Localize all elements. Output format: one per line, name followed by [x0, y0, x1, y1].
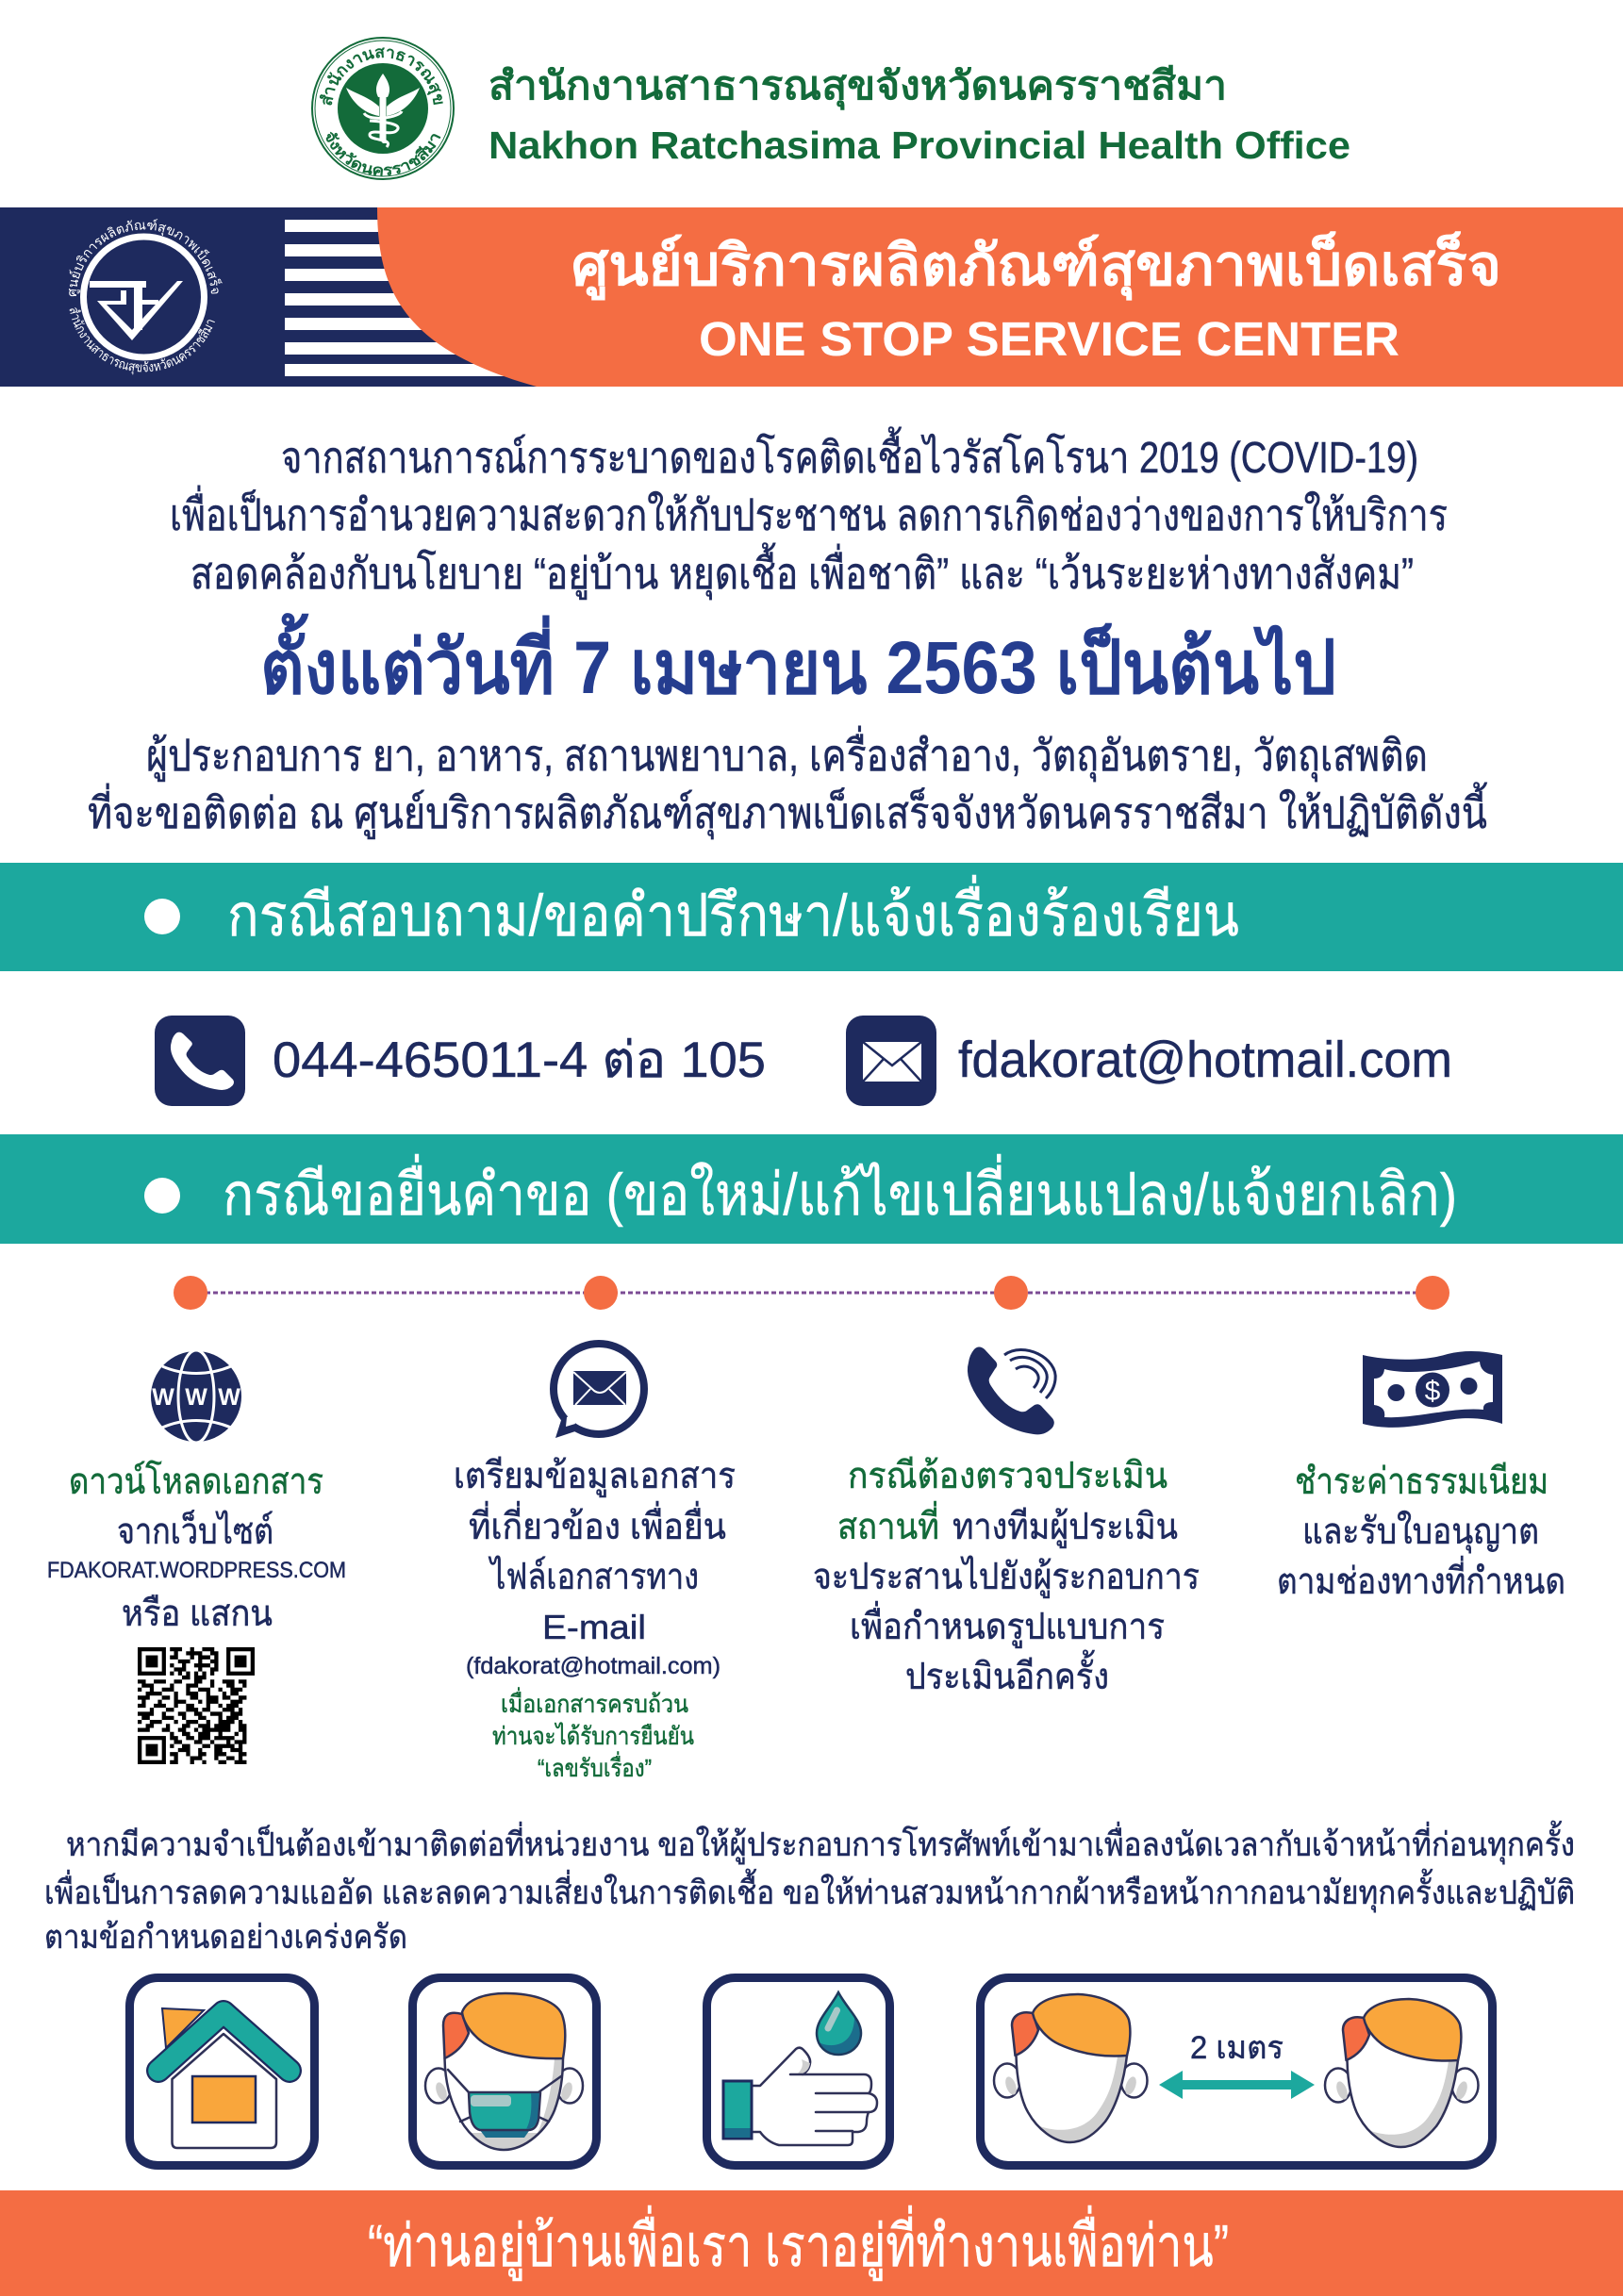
contact: email: fdakorat@hotmail.com — [958, 1032, 1452, 1088]
icon: speech bubble envelope — [554, 1344, 644, 1438]
logo: provincial health office seal — [311, 37, 455, 180]
logo: provincial health office seal: จังหวัดนครราชสีมา — [326, 132, 441, 175]
contact: phone: 044-465011-4 ต่อ 105 — [273, 1032, 766, 1088]
section bar: applications — [0, 1134, 1623, 1244]
person left — [994, 1994, 1147, 2142]
step 2: prepare documents: ท่านจะได้รับการยืนยัน — [492, 1722, 694, 1750]
step 4: pay fees — [1277, 1351, 1565, 1602]
step 2: prepare documents: “เลขรับเรื่อง” — [538, 1751, 652, 1782]
arrow: two metres — [1159, 2071, 1315, 2099]
footer band — [0, 2190, 1623, 2296]
organisation name in English: Nakhon Ratchasima Provincial Health Office — [489, 124, 1350, 167]
icon: globe www: W — [185, 1384, 207, 1411]
intro text: สอดคล้องกับนโยบาย “อยู่บ้าน หยุดเชื้อ เพื่อชาติ” และ “เว้นระยะห่างทางสังคม” — [190, 542, 1414, 601]
step 2: prepare documents: เตรียมข้อมูลเอกสาร — [454, 1456, 736, 1497]
step 4: pay fees: ชำระค่าธรรมเนียม — [1295, 1462, 1548, 1502]
header: health office logo and name — [311, 37, 1350, 180]
intro text — [170, 426, 1448, 601]
step 2: prepare documents: เมื่อเอกสารครบถ้วน — [501, 1687, 688, 1718]
section bar: applications: กรณีขอยื่นคำขอ (ขอใหม่/แก้ไขเปลี่ยนแปลง/แจ้งยกเลิก) — [223, 1154, 1457, 1228]
banner title Thai: ศูนย์บริการผลิตภัณฑ์สุขภาพเบ็ดเสร็จ — [571, 231, 1501, 301]
footer band: “ท่านอยู่บ้านเพื่อเรา เราอยู่ที่ทำงานเพื่อท่าน” — [368, 2205, 1229, 2281]
operators text — [88, 725, 1487, 840]
notice paragraph: ตามข้อกำหนดอย่างเคร่งครัด — [44, 1919, 407, 1956]
step 3: site inspection: เพื่อกำหนดรูปแบบการ — [850, 1601, 1165, 1648]
step 2: prepare documents: (fdakorat@hotmail.com) — [466, 1653, 720, 1679]
label: 2 metres: 2 เมตร — [1190, 2030, 1283, 2066]
icon: hand — [723, 2048, 877, 2145]
step 3: site inspection: ประเมินอีกครั้ง — [905, 1649, 1109, 1697]
panel: keep 2 metres apart — [981, 1978, 1492, 2165]
logo: one stop service seal: สำนักงานสาธารณสุขจังหวัดนครราชสีมา — [70, 307, 215, 375]
icon: globe www: W — [218, 1384, 240, 1411]
step 1: download — [47, 1350, 346, 1762]
icon: phone — [155, 1016, 245, 1106]
banner title English: ONE STOP SERVICE CENTER — [699, 312, 1399, 366]
icon: banknote: $ — [1425, 1376, 1441, 1407]
timeline — [174, 1276, 1449, 1310]
logo: provincial health office seal: สำนักงานสาธารณสุข — [319, 47, 443, 106]
date headline: ตั้งแต่วันที่ 7 เมษายน 2563 เป็นต้นไป — [260, 613, 1336, 709]
contact: email — [846, 1016, 1452, 1106]
icon: banknote — [1363, 1351, 1502, 1428]
operators text: ผู้ประกอบการ ยา, อาหาร, สถานพยาบาล, เครื่องสำอาง, วัตถุอันตราย, วัตถุเสพติด — [146, 725, 1428, 783]
contact: phone — [155, 1016, 766, 1106]
icon: envelope — [846, 1016, 936, 1106]
icon: globe www: W — [152, 1384, 174, 1411]
step 3: site inspection — [813, 1346, 1200, 1697]
step 2: prepare documents: ไฟล์เอกสารทาง — [488, 1556, 699, 1597]
logo: one stop service seal — [68, 219, 223, 375]
step 2: prepare documents: ที่เกี่ยวข้อง เพื่อยื่น — [469, 1501, 726, 1547]
QR code — [138, 1649, 253, 1762]
step 1: download: FDAKORAT.WORDPRESS.COM — [47, 1558, 346, 1583]
icon: phone with signal — [968, 1346, 1055, 1434]
organisation name in Thai: สำนักงานสาธารณสุขจังหวัดนครราชสีมา — [489, 63, 1227, 110]
step 4: pay fees: ตามช่องทางที่กำหนด — [1277, 1556, 1565, 1602]
section bar: enquiries: กรณีสอบถาม/ขอคำปรึกษา/แจ้งเรื่องร้องเรียน — [227, 875, 1239, 949]
icon: globe www — [151, 1350, 241, 1443]
section bar: enquiries — [0, 863, 1623, 971]
step 3: site inspection: จะประสานไปยังผู้ระกอบการ — [813, 1556, 1200, 1598]
step 3: site inspection: ทางทีมผู้ประเมิน — [952, 1507, 1178, 1548]
step 1: download: หรือ แสกน — [122, 1594, 273, 1634]
panel: wash hands — [707, 1978, 890, 2165]
step 2: prepare documents: E-mail — [542, 1608, 646, 1646]
step 3: site inspection: กรณีต้องตรวจประเมิน — [848, 1456, 1168, 1496]
banner: one stop service center — [0, 207, 1623, 387]
intro text: จากสถานการณ์การระบาดของโรคติดเชื้อไวรัสโคโรนา 2019 (COVID-19) — [281, 426, 1418, 482]
icon: water drop — [817, 1992, 861, 2055]
panel: wear a mask — [413, 1978, 596, 2165]
step 3: site inspection: สถานที่ — [837, 1501, 939, 1547]
step 1: download: จากเว็บไซต์ — [117, 1509, 273, 1552]
logo: one stop service seal: ศูนย์บริการผลิตภัณฑ์สุขภาพเบ็ดเสร็จ — [68, 219, 223, 296]
notice paragraph — [44, 1820, 1575, 1956]
panel: stay at home — [130, 1978, 315, 2165]
person right — [1325, 1999, 1479, 2147]
step 1: download: ดาวน์โหลดเอกสาร — [69, 1461, 323, 1502]
step 2: prepare documents — [454, 1344, 736, 1782]
step 4: pay fees: และรับใบอนุญาต — [1302, 1511, 1539, 1554]
